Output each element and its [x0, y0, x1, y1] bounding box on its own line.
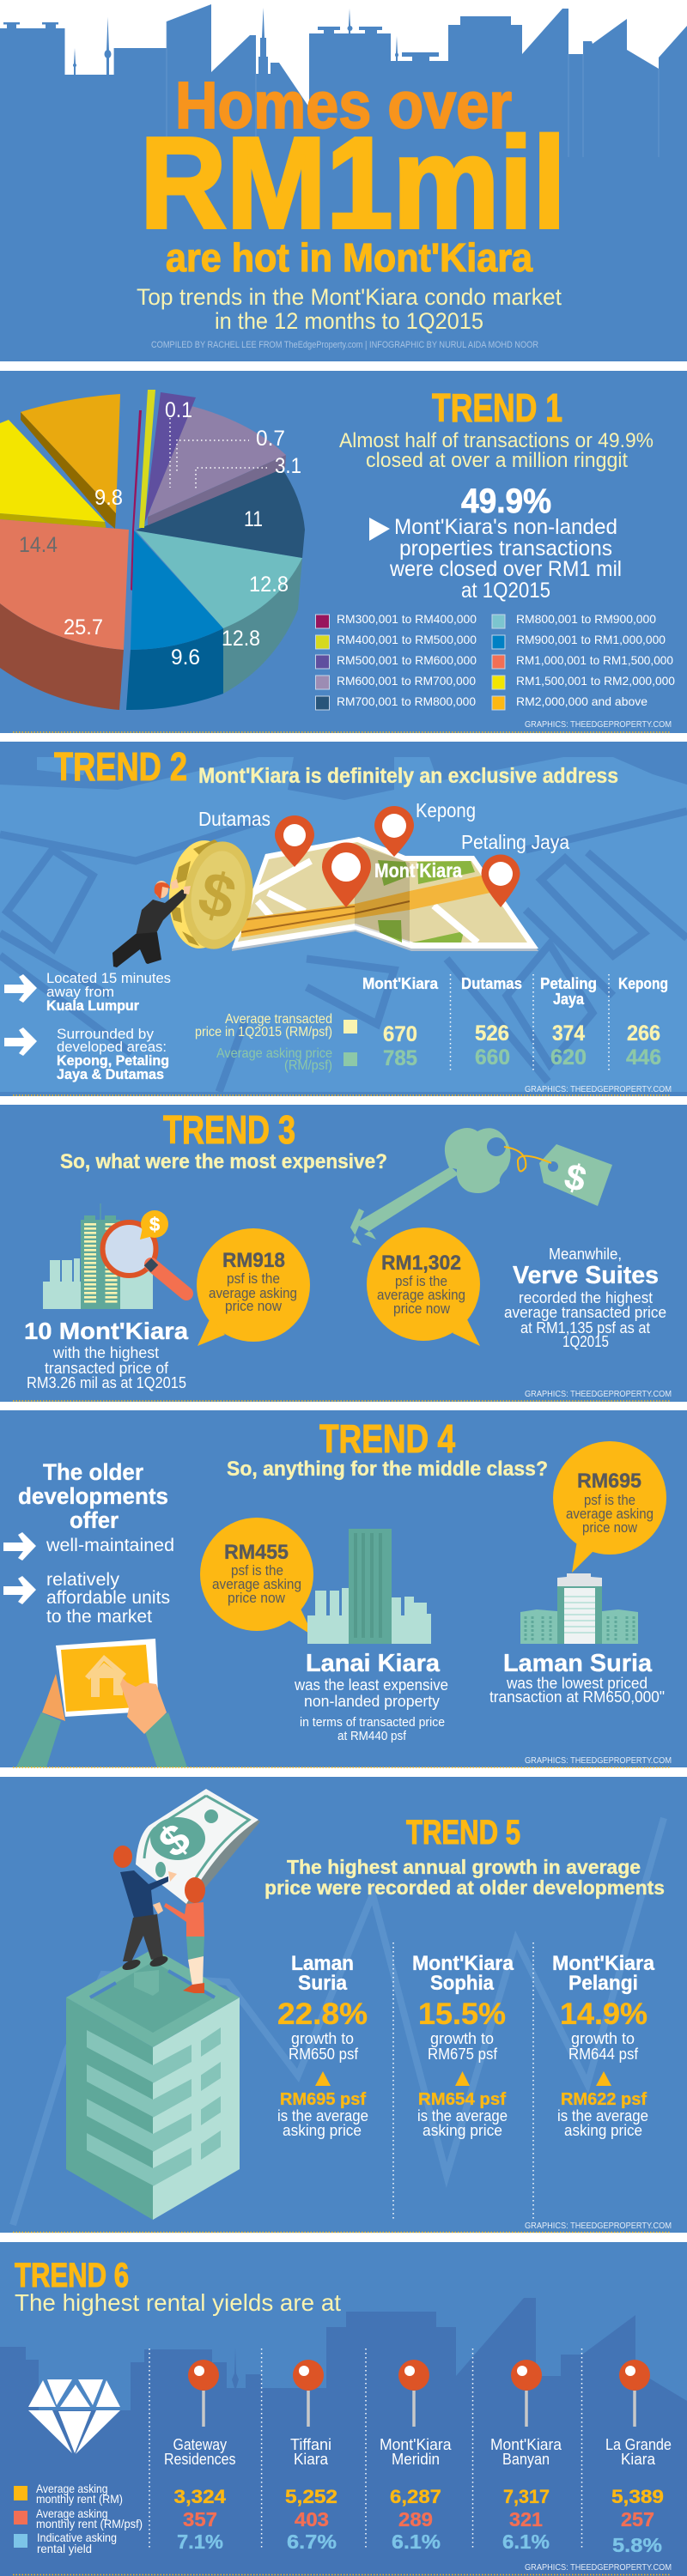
arrow and fact: well-maintained	[3, 1532, 174, 1561]
arrow and fact: surroundings: developed areas:	[57, 1039, 167, 1055]
column: Laman Suria	[277, 1952, 368, 2139]
panel: trend 6	[0, 2242, 687, 2576]
illustration: map with pins	[198, 799, 569, 951]
text: older developments: offer	[70, 1507, 119, 1533]
subtitle	[137, 284, 562, 334]
column: Laman Suria: 22.8%	[277, 1997, 368, 2031]
heading: trend 2: TREND 2	[54, 744, 187, 789]
column: Mont'Kiara Meridin: 289	[398, 2508, 433, 2531]
column: Mont'Kiara Meridin	[380, 2360, 452, 2553]
legend	[14, 2482, 143, 2555]
stat: 49.9%: 49.9%	[461, 482, 551, 520]
heading: trend 3: TREND 3	[163, 1107, 295, 1152]
pie values: 14.4	[19, 533, 58, 557]
pin: Kepong	[374, 806, 414, 857]
pie values: 9.6	[171, 646, 200, 670]
subheading: price were recorded at older developments	[264, 1876, 665, 1899]
skyline	[0, 4, 687, 361]
pie values: 25.7	[64, 615, 103, 639]
pin: Mont'Kiara	[322, 843, 371, 907]
column: Laman Suria: Suria	[298, 1972, 348, 1995]
text: Lanai Kiara: Lanai Kiara	[306, 1650, 441, 1677]
illustration: Laman Suria buildings	[520, 1573, 638, 1644]
source credit: GRAPHICS: THEEDGEPROPERTY.COM	[525, 1085, 672, 1094]
pie values: 0.1	[165, 398, 192, 422]
price table: 660	[475, 1046, 510, 1070]
column: Tiffani Kiara: 5,252	[285, 2486, 337, 2507]
column: Mont'Kiara Sophia: RM654 psf	[418, 2090, 506, 2109]
legend: RM900,001 to RM1,000,000	[516, 633, 666, 646]
price table	[195, 974, 668, 1073]
column: La Grande Kiara: 5.8%	[612, 2534, 662, 2556]
text: Verve Suites: average transacted price	[504, 1304, 666, 1321]
arrow and fact: surroundings: Surrounded by	[57, 1026, 154, 1042]
column: Mont'Kiara Pelangi: Mont'Kiara	[552, 1952, 655, 1975]
callout: RM695: average asking	[566, 1506, 654, 1522]
text: older developments: The older	[43, 1459, 143, 1485]
column: Tiffani Kiara: Kiara	[294, 2451, 329, 2468]
heading: trend 5: TREND 5	[406, 1814, 520, 1852]
stat: 49.9%: at 1Q2015	[461, 579, 550, 603]
header panel	[0, 4, 687, 361]
callout: RM455	[200, 1518, 313, 1636]
legend: RM300,001 to RM400,000	[337, 612, 477, 626]
column: Gateway Residences: Residences	[164, 2451, 235, 2468]
column: Laman Suria: is the average	[277, 2107, 368, 2124]
banknote	[136, 1789, 260, 1907]
text: Lanai Kiara: at RM440 psf	[337, 1729, 407, 1743]
panel: trend 1	[0, 371, 687, 733]
column: Mont'Kiara Pelangi: is the average	[557, 2107, 648, 2124]
text: Verve Suites: recorded the highest	[519, 1289, 653, 1306]
column: Mont'Kiara Sophia: Sophia	[430, 1972, 495, 1995]
callout: RM918: average asking	[209, 1285, 297, 1301]
text: 10 Mont'Kiara: 10 Mont'Kiara	[24, 1318, 188, 1344]
subtitle: Top trends in the Mont'Kiara condo market	[137, 284, 562, 310]
subheading: The highest annual growth in average	[287, 1856, 641, 1878]
map labels: Mont'Kiara	[374, 859, 462, 882]
title: are hot in Mont'Kiara	[166, 235, 532, 280]
text: Lanai Kiara: was the least expensive	[294, 1676, 448, 1694]
legend: RM800,001 to RM900,000	[516, 612, 656, 626]
column: Mont'Kiara Meridin: 6,287	[390, 2486, 441, 2507]
column: Mont'Kiara Meridin: Meridin	[392, 2451, 440, 2468]
pie values: 3.1	[275, 454, 301, 478]
column: Mont'Kiara Pelangi: Pelangi	[568, 1972, 638, 1995]
column: Mont'Kiara Pelangi: 14.9%	[560, 1997, 647, 2031]
source credit: GRAPHICS: THEEDGEPROPERTY.COM	[525, 1390, 672, 1399]
icon: key with price tag: $	[561, 1155, 590, 1200]
subheading: So, anything for the middle class?	[227, 1458, 548, 1481]
column: La Grande Kiara: 257	[621, 2508, 654, 2531]
text: older developments	[18, 1459, 168, 1533]
text: Laman Suria: was the lowest priced	[506, 1675, 647, 1692]
column: Mont'Kiara Banyan: 321	[509, 2508, 543, 2531]
pie chart	[0, 390, 305, 710]
illustration: building with couple and banknote	[66, 1789, 260, 2220]
panel: trend 4	[0, 1410, 687, 1767]
price table: 785	[383, 1046, 417, 1070]
subheading	[339, 429, 654, 472]
subheading: Mont'Kiara is definitely an exclusive address	[198, 764, 618, 788]
background skyline	[0, 2298, 687, 2576]
legend: Average asking	[36, 2506, 108, 2520]
column: Mont'Kiara Meridin: 6.1%	[392, 2531, 441, 2553]
legend	[316, 612, 675, 710]
callout: RM918: RM918	[222, 1249, 285, 1272]
column: Laman Suria: RM695 psf	[280, 2090, 366, 2109]
pie values: 11	[244, 507, 263, 531]
heading: trend 4: TREND 4	[319, 1416, 455, 1461]
column: Gateway Residences: 7.1%	[177, 2531, 223, 2553]
text: Laman Suria	[489, 1650, 665, 1706]
legend: rental yield	[37, 2542, 92, 2555]
callout: RM695	[553, 1441, 666, 1573]
text: 10 Mont'Kiara: RM3.26 mil as at 1Q2015	[27, 1374, 186, 1391]
subheading: The highest rental yields are at	[15, 2289, 341, 2316]
price table: Average asking price	[216, 1046, 332, 1061]
credits: COMPILED BY RACHEL LEE FROM TheEdgeProperty.com | INFOGRAPHIC BY NURUL AIDA MOHD NOOR	[151, 340, 538, 350]
column: Tiffani Kiara: Tiffani	[290, 2436, 331, 2453]
legend: RM2,000,000 and above	[516, 694, 647, 708]
price table: 670	[383, 1022, 417, 1046]
arrow and fact: affordable: relatively	[46, 1570, 119, 1590]
column: Mont'Kiara Pelangi: RM622 psf	[561, 2090, 647, 2109]
column: Mont'Kiara Pelangi: asking price	[564, 2122, 642, 2139]
column: Mont'Kiara Sophia: 15.5%	[418, 1997, 506, 2031]
subheading: closed at over a million ringgit	[366, 449, 628, 472]
title: Homes over	[175, 69, 512, 142]
icon: key with price tag	[350, 1128, 612, 1246]
legend: monthly rent (RM)	[36, 2492, 123, 2506]
column: La Grande Kiara: Kiara	[621, 2451, 656, 2468]
callout: RM918: price now	[225, 1298, 283, 1314]
banknote: $	[150, 1814, 199, 1866]
column: Mont'Kiara Pelangi: growth to	[571, 2030, 635, 2047]
callout: RM455: psf is the	[231, 1562, 283, 1579]
text: Lanai Kiara: non-landed property	[304, 1693, 440, 1710]
price table: 446	[626, 1046, 661, 1070]
arrow and fact: location	[4, 970, 171, 1014]
column: Laman Suria: growth to	[291, 2030, 354, 2047]
illustration: man pushing coin	[112, 837, 259, 967]
arrow and fact: location: Located 15 minutes	[46, 970, 171, 986]
subheading: So, what were the most expensive?	[60, 1150, 387, 1173]
price table: Petaling	[540, 975, 597, 992]
legend: RM1,000,001 to RM1,500,000	[516, 653, 673, 667]
price table: Average transacted	[225, 1012, 332, 1027]
price table: Jaya	[553, 991, 585, 1008]
pie values: 12.8	[222, 627, 260, 651]
callout: RM695: RM695	[577, 1470, 641, 1493]
column: Mont'Kiara Sophia: asking price	[423, 2122, 502, 2139]
column: Laman Suria: Laman	[291, 1952, 354, 1975]
illustration: hands holding tablet	[16, 1639, 187, 1767]
price table: 266	[627, 1021, 660, 1046]
column: Mont'Kiara Banyan: 6.1%	[502, 2531, 550, 2553]
callout: RM1,302: psf is the	[395, 1273, 447, 1289]
callout: RM1,302: average asking	[377, 1287, 465, 1303]
illustration: Lanai Kiara buildings	[307, 1529, 431, 1644]
arrow and fact: surroundings: Jaya & Dutamas	[57, 1066, 164, 1082]
text: Verve Suites: Meanwhile,	[549, 1246, 622, 1263]
text: older developments: developments	[18, 1483, 168, 1509]
callout: RM455: price now	[228, 1590, 286, 1606]
price table: Kepong	[618, 975, 668, 992]
stat: 49.9%	[369, 482, 622, 603]
price table: Mont'Kiara	[362, 975, 439, 992]
panel: trend 3	[0, 1105, 687, 1402]
column: Mont'Kiara Sophia	[412, 1952, 514, 2139]
column: Tiffani Kiara: 403	[295, 2508, 329, 2531]
stat: 49.9%: Mont'Kiara's non-landed	[394, 515, 617, 539]
map labels	[198, 799, 569, 882]
legend: RM700,001 to RM800,000	[337, 694, 476, 708]
callout: RM695: price now	[582, 1519, 638, 1536]
column: La Grande Kiara	[605, 2360, 672, 2556]
text: Verve Suites: 1Q2015	[562, 1333, 609, 1350]
column: Tiffani Kiara: 6.7%	[287, 2531, 337, 2553]
text: 10 Mont'Kiara	[24, 1318, 188, 1391]
callout: RM455: average asking	[212, 1576, 301, 1592]
illustration: man pushing coin: $	[192, 858, 242, 934]
callout: RM695: psf is the	[584, 1492, 635, 1508]
column: Laman Suria: RM650 psf	[289, 2046, 359, 2063]
pie values: 9.8	[94, 486, 123, 510]
stat: 49.9%: were closed over RM1 mil	[389, 557, 622, 581]
column: La Grande Kiara: La Grande	[605, 2436, 672, 2453]
column: Mont'Kiara Banyan: 7,317	[503, 2486, 550, 2507]
heading: trend 6: TREND 6	[15, 2257, 129, 2294]
arrow and fact: affordable	[3, 1570, 170, 1627]
pie leader lines	[170, 418, 267, 489]
column: Mont'Kiara Sophia: growth to	[430, 2030, 494, 2047]
column: La Grande Kiara: 5,389	[611, 2486, 664, 2507]
column: Mont'Kiara Banyan	[490, 2360, 562, 2553]
map labels: Kepong	[416, 799, 476, 821]
column: Tiffani Kiara	[285, 2360, 337, 2553]
column: Gateway Residences	[164, 2360, 235, 2553]
price table: Dutamas	[461, 975, 522, 992]
callout: RM1,302: RM1,302	[381, 1252, 461, 1275]
arrow and fact: location: Kuala Lumpur	[46, 997, 139, 1014]
pin: Petaling Jaya	[481, 855, 520, 907]
source credit: GRAPHICS: THEEDGEPROPERTY.COM	[525, 2221, 672, 2231]
title: RM1mil	[140, 110, 566, 255]
pie values: 0.7	[256, 427, 285, 451]
text: Lanai Kiara	[294, 1650, 448, 1743]
icon: diamond	[28, 2379, 120, 2454]
heading: trend 1: TREND 1	[432, 385, 562, 430]
pin: Dutamas	[275, 815, 314, 867]
arrow and fact: affordable: to the market	[46, 1607, 152, 1627]
text: 10 Mont'Kiara: with the highest	[52, 1344, 159, 1361]
price table: (RM/psf)	[284, 1058, 332, 1073]
woman	[164, 1877, 205, 1993]
arrow and fact: well-maintained: well-maintained	[46, 1536, 174, 1555]
arrow and fact: location: away from	[46, 984, 114, 1000]
source credit: GRAPHICS: THEEDGEPROPERTY.COM	[525, 1756, 672, 1766]
pie values	[19, 398, 301, 670]
text: Laman Suria: transaction at RM650,000"	[489, 1688, 665, 1706]
legend: RM1,500,001 to RM2,000,000	[516, 674, 675, 688]
arrow and fact: surroundings: Kepong, Petaling	[57, 1052, 169, 1069]
legend: Average asking	[36, 2482, 108, 2495]
arrow and fact: affordable: affordable units	[46, 1588, 170, 1608]
price table: 620	[550, 1046, 587, 1070]
subheading: Almost half of transactions or 49.9%	[339, 429, 654, 452]
column: Mont'Kiara Sophia: RM675 psf	[428, 2046, 498, 2063]
pie values: 12.8	[249, 573, 289, 597]
stat: 49.9%: properties transactions	[399, 536, 612, 561]
text: Verve Suites: at RM1,135 psf as at	[520, 1319, 650, 1336]
source credit: GRAPHICS: THEEDGEPROPERTY.COM	[525, 2563, 672, 2573]
column: Mont'Kiara Sophia: Mont'Kiara	[412, 1952, 514, 1975]
callout: RM918: psf is the	[227, 1270, 280, 1287]
illustration: tower with magnifier: $	[149, 1214, 160, 1235]
panel: trend 5	[0, 1777, 687, 2233]
callout: RM1,302: price now	[393, 1300, 451, 1317]
price table: 374	[552, 1021, 585, 1046]
callout: RM455: RM455	[224, 1541, 289, 1564]
price table: price in 1Q2015 (RM/psf)	[195, 1025, 332, 1039]
price table: 526	[475, 1021, 509, 1046]
column: Gateway Residences: Gateway	[173, 2436, 227, 2453]
subtitle: in the 12 months to 1Q2015	[215, 308, 483, 334]
column: Mont'Kiara Pelangi	[552, 1952, 655, 2139]
panel: trend 2	[0, 742, 687, 1096]
subheading	[264, 1856, 665, 1899]
map labels: Petaling Jaya	[461, 831, 569, 853]
map labels: Dutamas	[198, 808, 271, 830]
text: 10 Mont'Kiara: transacted price of	[45, 1360, 169, 1377]
legend: RM600,001 to RM700,000	[337, 674, 476, 688]
source credit: GRAPHICS: THEEDGEPROPERTY.COM	[525, 720, 672, 730]
text: Verve Suites	[504, 1246, 666, 1350]
column: Mont'Kiara Banyan: Banyan	[502, 2451, 550, 2468]
column: Mont'Kiara Meridin: Mont'Kiara	[380, 2436, 452, 2453]
title	[140, 69, 566, 280]
column: Mont'Kiara Banyan: Mont'Kiara	[490, 2436, 562, 2453]
column: Mont'Kiara Sophia: is the average	[417, 2107, 508, 2124]
legend: RM500,001 to RM600,000	[337, 653, 477, 667]
text: Verve Suites: Verve Suites	[513, 1262, 659, 1289]
legend: monthly rent (RM/psf)	[36, 2517, 143, 2531]
text: Lanai Kiara: in terms of transacted price	[300, 1715, 445, 1730]
column: Mont'Kiara Pelangi: RM644 psf	[568, 2046, 639, 2063]
column: Laman Suria: asking price	[283, 2122, 362, 2139]
text: Laman Suria: Laman Suria	[503, 1650, 653, 1677]
column: Gateway Residences: 3,324	[173, 2486, 227, 2507]
legend: RM400,001 to RM500,000	[337, 633, 477, 646]
illustration: tower with magnifier	[43, 1203, 186, 1309]
man	[113, 1846, 177, 1972]
callout: RM1,302	[367, 1227, 480, 1346]
column: Gateway Residences: 357	[183, 2508, 217, 2531]
legend: Indicative asking	[37, 2531, 117, 2544]
callout: RM918	[197, 1228, 310, 1346]
arrow and fact: surroundings	[4, 1026, 169, 1082]
